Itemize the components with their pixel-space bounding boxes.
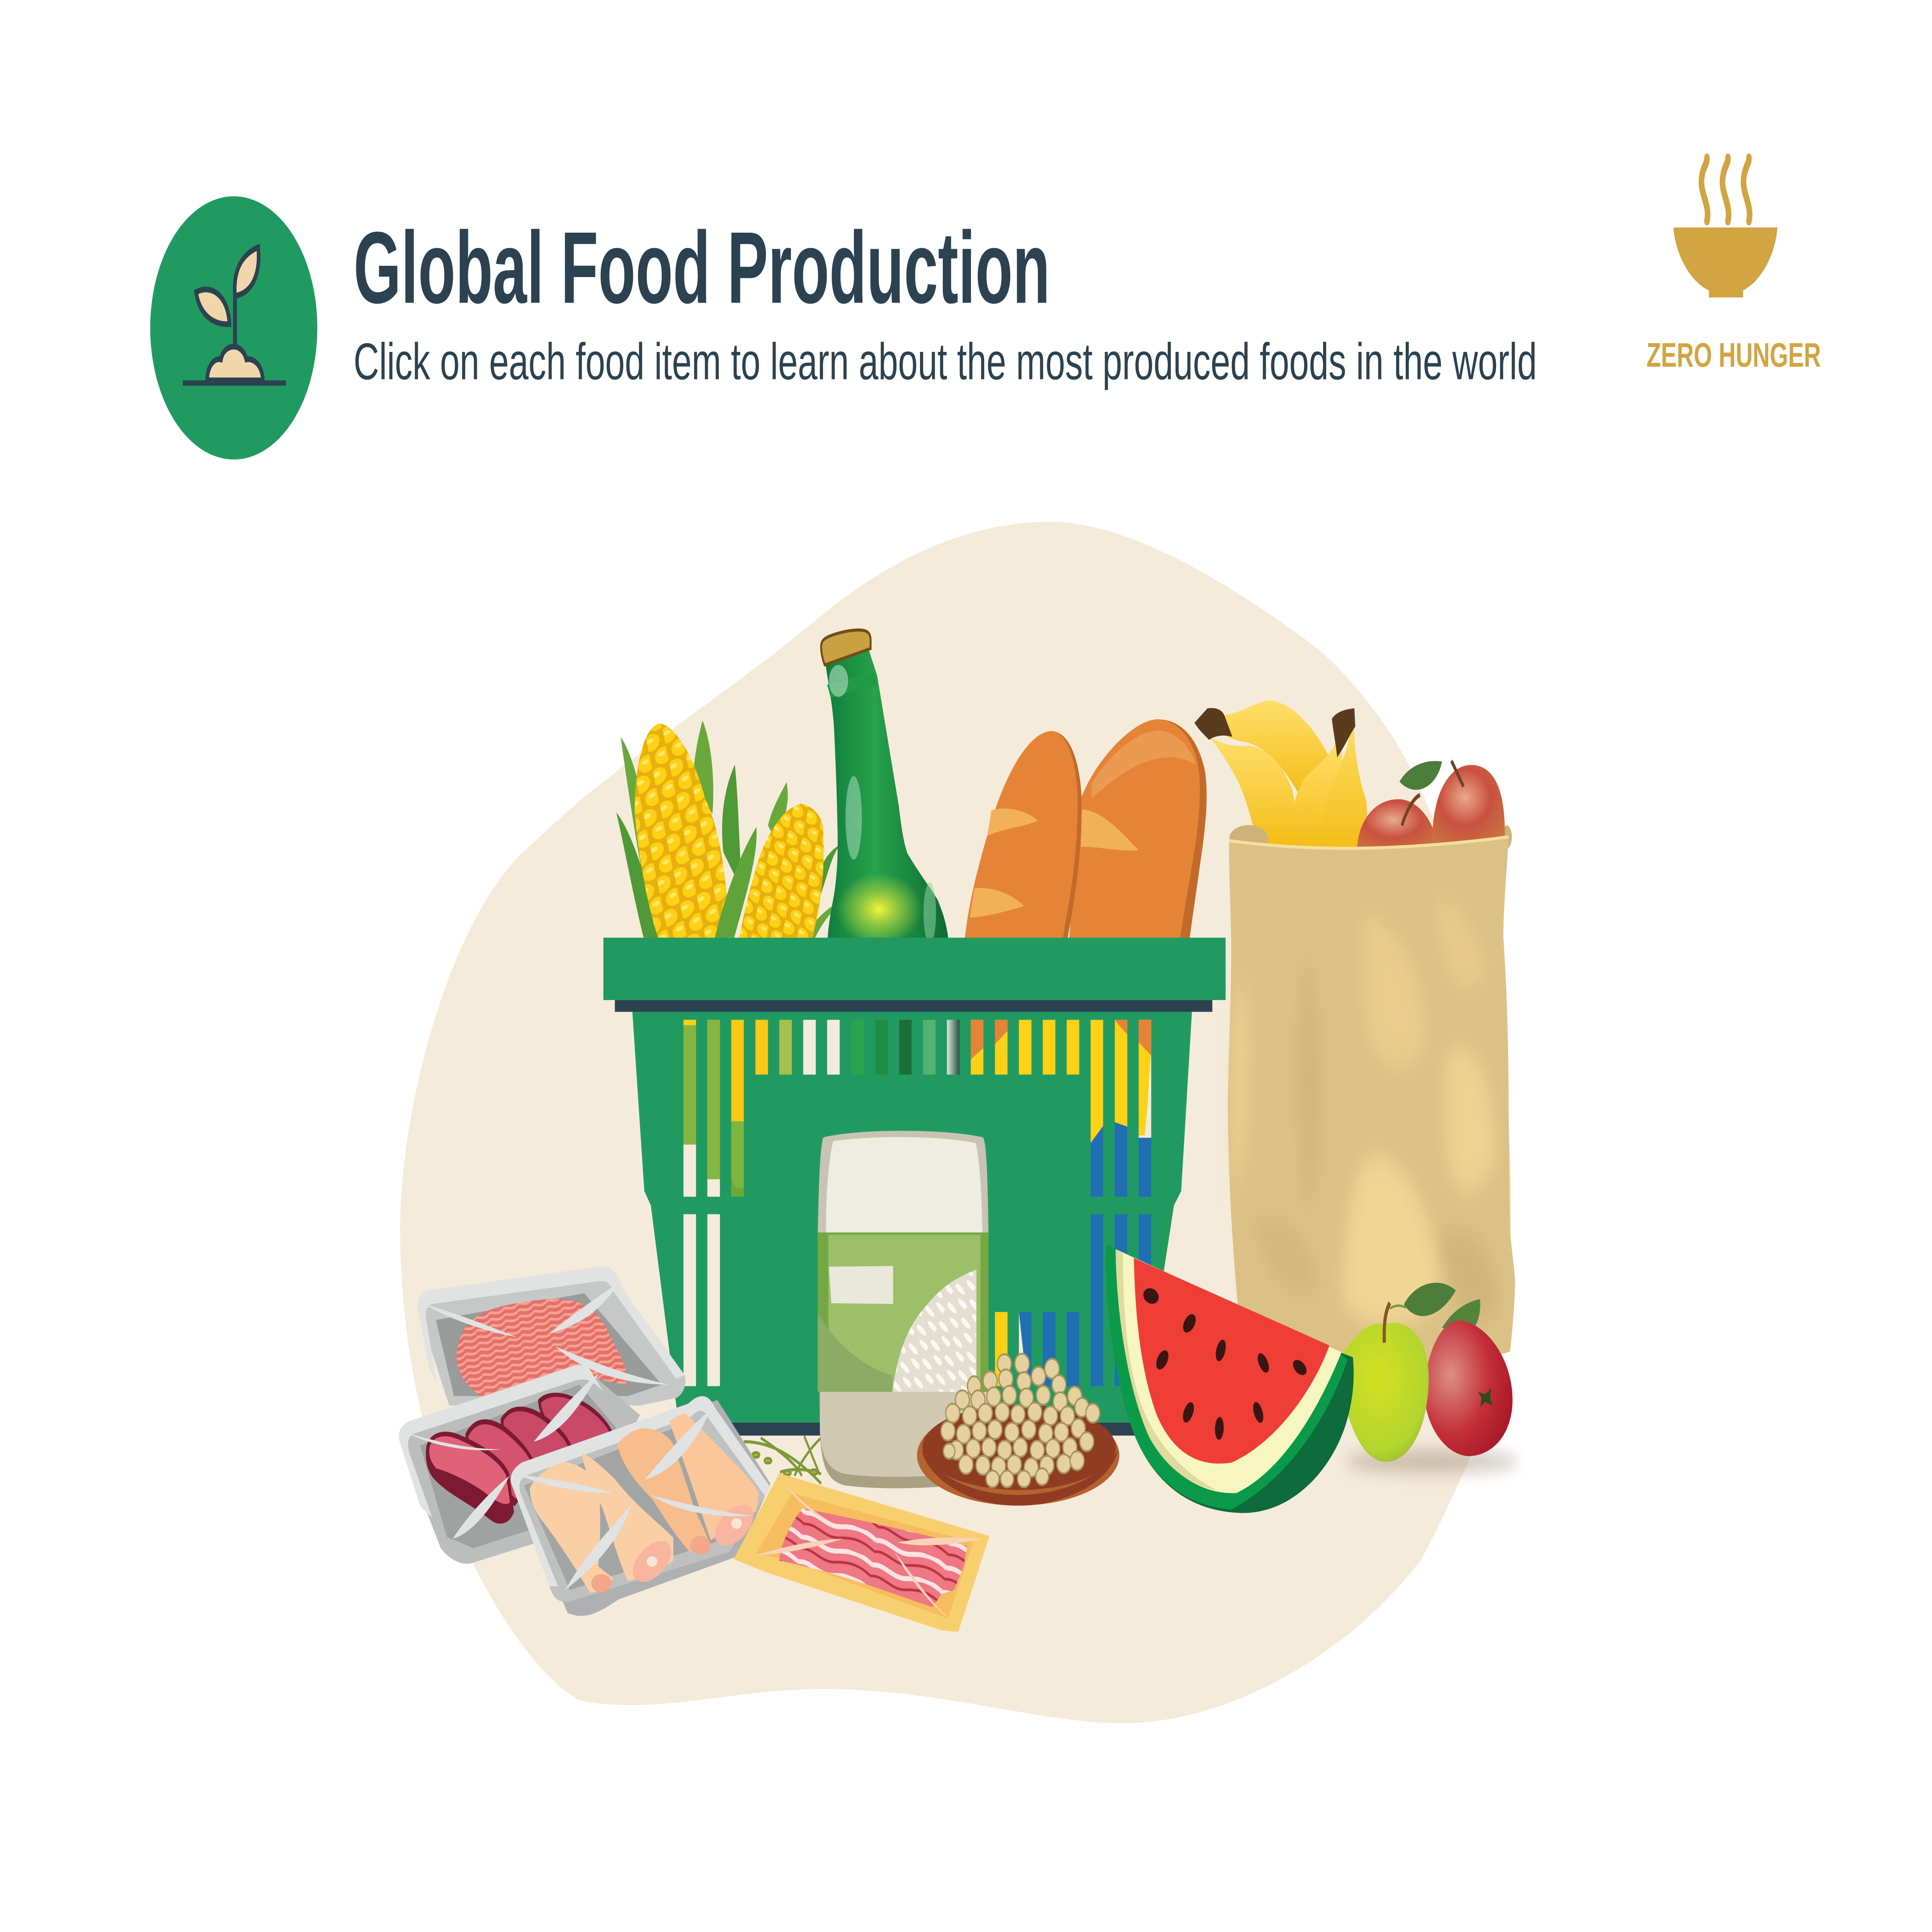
soybeans on plate xyxy=(917,1354,1119,1505)
paper bag with apples xyxy=(1228,761,1515,1369)
title: Global Food Production xyxy=(354,211,1050,325)
beige blob backdrop xyxy=(400,522,1511,1723)
zero hunger badge: ZERO HUNGER xyxy=(1646,336,1821,374)
bacon pack xyxy=(734,1473,990,1632)
green bottle xyxy=(821,630,948,945)
basket xyxy=(603,938,1226,1435)
tray: ground meat xyxy=(418,1266,685,1406)
tray: steaks xyxy=(399,1365,640,1564)
zero hunger badge xyxy=(1646,158,1821,374)
bread loaves xyxy=(965,719,1207,940)
apples on the floor xyxy=(1338,1283,1519,1473)
basket slots with contents xyxy=(684,1020,1151,1386)
watermelon slice xyxy=(1106,1245,1354,1513)
bananas xyxy=(1194,700,1367,852)
tray: chicken xyxy=(511,1396,770,1616)
rice plant behind bag xyxy=(744,1436,850,1506)
rice bag xyxy=(818,1131,988,1488)
subtitle: Click on each food item to learn about the most produced foods in the world xyxy=(354,332,1537,390)
melon seeds xyxy=(1143,1286,1308,1440)
corn xyxy=(616,721,847,938)
circular sprout icon xyxy=(150,196,317,459)
